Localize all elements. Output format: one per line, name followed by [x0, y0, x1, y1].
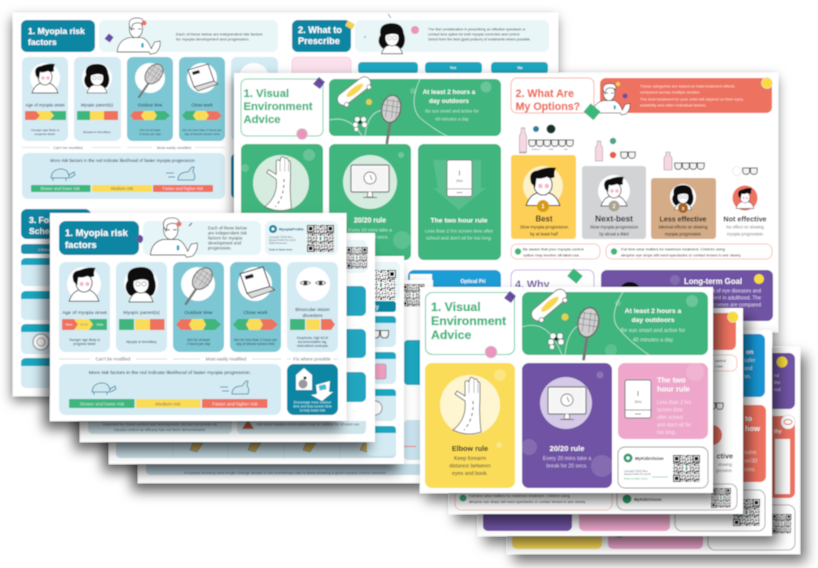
card: binocular vision — [287, 262, 338, 352]
card: two hour rule: Less than 2 hrs — [657, 400, 692, 406]
banner with intro text: Each of these below — [208, 226, 248, 230]
data table strip — [116, 442, 396, 458]
panel: axial length chart — [408, 270, 501, 320]
podium: next-best: by about a third — [599, 232, 629, 236]
heading: Visual Environment Advice — [426, 291, 516, 358]
banner: treatment categories: compared across multiple studies. — [640, 90, 700, 94]
schedule rows — [21, 258, 91, 388]
card: elbow rule: Keep forearm — [454, 456, 487, 462]
card: age of onset: progress faster — [73, 342, 97, 346]
card: age of onset: Age of myopia onset — [62, 310, 107, 316]
card: two hour rule: school and don't sit for too long. — [426, 236, 492, 240]
banner with intro text: for myopia development and progression. — [176, 36, 250, 42]
red panel — [720, 405, 766, 482]
banner: two hours outdoors — [329, 74, 501, 143]
note pills — [511, 244, 772, 259]
banner: treatment categories: The best treatment for your child will depend on their eyes, — [640, 96, 744, 102]
colour strips — [483, 505, 670, 531]
card: two hour rule: Less than 2 hrs screen time after — [425, 228, 494, 234]
card: two hour rule — [618, 363, 708, 439]
banner: two hours outdoors: 40 minutes a day — [435, 116, 470, 122]
summary panel: Medium risk — [155, 402, 181, 406]
heading: What to Prescribe: 2. What to — [298, 25, 342, 35]
banner with intro text — [143, 218, 261, 257]
banner: two hours outdoors — [522, 287, 708, 359]
red panel: sses. — [744, 467, 756, 473]
table header pills — [292, 57, 548, 77]
summary panel: Slower and lower risk — [40, 186, 81, 191]
divider labels — [22, 146, 225, 150]
banner: prescribing: The first consideration in prescribing an effective spectacle or — [428, 28, 526, 32]
not effective option — [702, 403, 733, 473]
podium: less effective: Less effective — [660, 216, 707, 224]
note pills: atropine eye drops still need spectacles or contact lenses to see clearly. — [621, 254, 741, 258]
card: elbow rule — [241, 144, 323, 254]
stacked sheet: front Visual Environment Advice — [420, 287, 713, 493]
podium: next-best: Slow myopia progression — [590, 224, 639, 230]
card: 20/20 rule: break for 20 secs. — [351, 234, 389, 240]
card: myopic parents: Myopic parent(s) — [123, 310, 160, 316]
stacked sheet: right back page — [507, 347, 800, 554]
card: outdoor time: Outdoor time — [184, 310, 213, 316]
modifier divider labels: Can't be modified — [96, 356, 131, 362]
stacked sheet: right third page — [478, 330, 772, 536]
option: not effective: myopia progression — [727, 232, 764, 236]
notes strip: myopia control as efficacy has not been demonstrated. — [114, 428, 206, 432]
divider labels: Most easily modified — [157, 146, 191, 150]
heading: Visual Environment Advice: Environment — [244, 101, 313, 113]
heading: Follow-up Schedule: Schedule — [29, 226, 67, 236]
banner: two hours outdoors: Be sun smart and active for — [621, 328, 685, 334]
stacked sheet: second back page — [80, 233, 375, 442]
logo and QR box: MyopiaProfile — [279, 228, 304, 232]
banner: prescribing: contact lens option for both myopia correction and control. — [428, 32, 520, 36]
podium: best: HAL — [564, 148, 569, 151]
notes strip: Not every myopia control option may be suitable for off-label use — [257, 422, 359, 426]
table rows — [367, 316, 396, 456]
banner: two hours outdoors: day outdoors — [631, 317, 675, 324]
card: age of onset: 10-14 — [80, 322, 88, 326]
teal panels — [340, 286, 366, 402]
podium: best: 1 — [542, 204, 545, 210]
banner: two hours outdoors: At least 2 hours a — [625, 308, 682, 315]
heading: Myopia risk factors: 1. Myopia risk — [65, 228, 129, 239]
purple panel: red — [774, 387, 781, 392]
heading: What Are My Options — [511, 78, 594, 113]
stacked sheet: front Myopia risk factors — [50, 213, 346, 421]
heading: Follow-up Schedule — [21, 209, 91, 239]
banner: treatment categories: These categories are based on total treatment effects — [640, 84, 735, 88]
card: outdoor time: Aim for at least — [187, 338, 210, 342]
banner: long-term goal: To reduce risk of eye diseases and — [684, 288, 761, 294]
panel: encourage outdoor time: Encourage more outdoor — [294, 400, 332, 404]
banner: long-term goal: vision impairment in adulthood. The — [682, 296, 761, 302]
banner with intro text — [99, 18, 278, 54]
follow-up pill: ly — [374, 305, 380, 311]
card: elbow rule — [425, 363, 515, 488]
sheet qr — [362, 262, 400, 300]
notes strip — [88, 420, 366, 434]
caption strip: A myopia showing axial length change similar to the emmetrope rate is likely showing a good myopia control outcome — [184, 470, 386, 475]
panel: encourage outdoor time — [287, 364, 338, 415]
logo and QR box: Myopia Profile Pty Ltd All — [269, 239, 296, 242]
blue panel: safer — [744, 358, 755, 364]
logo and QR box: Copyright ©2023 Alive — [624, 470, 648, 473]
card: close work: Close work — [243, 310, 268, 316]
card: age of onset — [59, 262, 110, 352]
risk cards: 2 hours per day — [139, 132, 161, 136]
card: myopic parents: Myopia is hereditary — [126, 340, 157, 344]
banner with intro text: are independent risk — [208, 230, 248, 236]
banner: prescribing: Select from the best (gold podium) of treatments where possible. — [428, 38, 531, 42]
heading: Follow-up Schedule: 3. Follow-up — [29, 215, 79, 225]
note pill: control — [715, 359, 726, 363]
summary panel: Slower and lower risk — [80, 402, 125, 406]
podium: next-best: Next-best — [595, 214, 633, 224]
banner with intro text: progression. — [208, 246, 232, 250]
card: elbow rule: Elbow rule — [452, 444, 488, 453]
card: age of onset: Older — [96, 322, 104, 326]
note pill — [690, 355, 737, 371]
card: binocular vision: Esophoria, high AC/A — [297, 336, 329, 340]
card: two hour rule: The two hour rule — [430, 218, 488, 224]
purple panel — [760, 353, 795, 409]
schedule strip: 1 Discuss — [38, 248, 53, 252]
heading: Myopia risk factors: factors — [65, 240, 97, 251]
modifier divider labels: Fix where possible — [293, 356, 331, 362]
heading: Why — [511, 268, 594, 310]
banner: prescribing — [355, 14, 549, 54]
qr box — [675, 490, 765, 531]
stacked sheet: right second page — [449, 308, 743, 514]
podium: less effective — [651, 152, 716, 239]
card: two hour rule: after school — [657, 415, 683, 421]
blue panel: on. — [744, 374, 751, 380]
notes and qr row: Full time wear matters for maximum treatment. Children using — [469, 494, 570, 498]
logo and QR box: Scan to learn more — [269, 248, 293, 252]
banner: two hours outdoors: day outdoors — [429, 98, 469, 105]
not effective option: slowing — [718, 462, 733, 467]
not effective option: ctive — [717, 452, 733, 460]
red panel: nutes — [744, 450, 757, 456]
card: outdoor time: 2 hours per day — [187, 342, 211, 346]
colour strips — [512, 528, 703, 549]
heading: Visual Environment Advice: 1. Visual — [244, 88, 289, 100]
summary panel: More risk factors in the red indicate likelihood of faster myopia progression. — [89, 370, 251, 376]
panel: encourage outdoor time: time and less screen time — [293, 404, 332, 408]
summary panel — [22, 153, 278, 199]
heading: Visual Environment Advice: Environment — [431, 314, 506, 328]
modifier divider labels — [59, 356, 338, 362]
card: binocular vision: Binocular vision — [295, 307, 330, 313]
red panel — [760, 415, 795, 498]
risk cards: day of leisure screen time — [184, 132, 220, 136]
card: 20/20 rule: Every 20 mins take a — [348, 228, 392, 232]
risk cards: progress faster — [35, 132, 55, 136]
podium: best: Slow myopia progression — [520, 224, 569, 230]
heading: What Are My Options: 2. What Are — [516, 88, 574, 100]
heading: Myopia risk factors: factors — [28, 37, 57, 47]
banner: treatment categories: suitability and other individual factors. — [640, 102, 706, 108]
heading: Visual Environment Advice: Advice — [431, 328, 471, 342]
podium: less effective: Minimal effects on slowing — [659, 224, 708, 230]
banner: long-term goal — [601, 270, 773, 321]
card: 20/20 rule — [521, 363, 613, 488]
option: not effective: No effect on slowing — [726, 224, 764, 230]
summary panel — [59, 364, 281, 415]
card: 20/20 rule: Every 20 mins take a — [543, 456, 591, 462]
summary panel: Faster and higher risk — [163, 186, 204, 191]
card: binocular vision: intermittent exotropia — [297, 344, 328, 348]
notes and qr row: atropine eye drops still need spectacles or contact lenses to see clearly. — [469, 500, 586, 504]
red banner — [690, 312, 738, 350]
summary panel: Medium risk — [111, 186, 134, 191]
card: two hour rule: screen time — [657, 408, 683, 414]
modifier divider labels: Most easily modified — [206, 356, 247, 362]
divider labels: Can't be modified — [53, 146, 83, 150]
card: elbow rule: distance between — [449, 464, 491, 470]
option: not effective: Not effective — [723, 214, 767, 224]
card: close work — [230, 262, 281, 352]
panel: axial length chart: Optical Pri — [460, 279, 486, 285]
red panel: to — [745, 414, 752, 423]
banner: long-term goal: Long-term Goal — [684, 277, 742, 286]
risk cards: Myopia is hereditary — [83, 130, 111, 134]
podium: less effective: myopia progression — [665, 232, 702, 236]
blue panel: and — [744, 366, 753, 372]
banner: treatment categories — [584, 78, 772, 120]
purple panel: nd — [774, 373, 780, 378]
follow-up pill — [367, 301, 396, 312]
logo and QR box — [265, 221, 338, 255]
notes and qr row — [455, 484, 737, 510]
schedule strip — [21, 244, 91, 254]
heading: What to Prescribe: Prescribe — [298, 36, 340, 46]
sheet qr box — [340, 240, 368, 273]
podium: less effective: 3 — [682, 206, 685, 211]
card: two hour rule: The two — [657, 376, 686, 384]
note pills: Full time wear matters for maximum treatment. Children using — [621, 248, 725, 252]
heading: Visual Environment Advice: 1. Visual — [431, 300, 481, 314]
card: close work: day of leisure screen time — [236, 342, 275, 346]
risk cards: Close work — [191, 102, 213, 108]
banner: two hours outdoors: Be sun smart and active for — [425, 108, 479, 114]
logo and QR box — [618, 447, 708, 488]
podium: next-best: 2 — [613, 204, 616, 210]
card: age of onset: Younger age likely to — [69, 338, 100, 342]
banner: two hours outdoors: 40 minutes a day — [633, 338, 674, 344]
note pills: Be aware that your myopia control — [523, 246, 584, 252]
heading: Visual Environment Advice — [241, 77, 325, 140]
table header pills: No — [517, 66, 523, 70]
note pills: option may involve off-label use. — [523, 252, 580, 258]
banner: long-term goal: long-term outcomes are compared — [685, 302, 761, 308]
option: not effective — [723, 166, 767, 236]
risk cards: Aim for less than 2 hours per — [182, 128, 222, 132]
stacked sheet: fourth back page — [138, 280, 433, 483]
risk cards: Younger age likely to — [31, 128, 60, 132]
banner: two hours outdoors: At least 2 hours a — [423, 89, 476, 96]
page: 1. Myopia risk factors (back sheet) — [13, 13, 558, 396]
logo and QR box: Scan to learn more — [624, 476, 648, 480]
logo and QR box: Copyright ©2023 Alive — [269, 236, 293, 239]
card: elbow rule: eyes and book. — [452, 471, 488, 477]
card: two hour rule — [418, 144, 501, 260]
heading: Visual Environment Advice: Advice — [244, 114, 281, 126]
logo and QR box: MyKidsVision — [635, 456, 664, 461]
heading: Why: 4. Why — [515, 279, 549, 291]
blue panel — [720, 334, 765, 397]
heading: Myopia risk factors: 1. Myopia risk — [28, 26, 85, 36]
banner with intro text: factors for myopia — [208, 236, 243, 240]
heading: What to Prescribe — [292, 20, 355, 52]
qr box — [708, 505, 795, 550]
heading: Myopia risk factors — [21, 20, 95, 52]
podium: best: by at least half — [530, 232, 559, 236]
purple panel: the — [774, 380, 781, 385]
podium: best — [511, 124, 576, 239]
page: Visual Environment Advice and Options sheet — [234, 73, 778, 332]
card: two hour rule: and don't sit for — [657, 422, 691, 428]
panel: encourage outdoor time: to help lower risk — [300, 408, 326, 412]
sheet qr and panels — [402, 284, 424, 460]
podium: best: Atropine — [519, 152, 528, 154]
card: 20/20 rule: 20/20 rule — [354, 218, 386, 224]
podium: best: DIMS — [548, 149, 554, 151]
card: myopic parents — [116, 262, 167, 352]
banner with intro text: development and — [208, 240, 242, 246]
card: two hour rule: hour rule — [657, 384, 690, 394]
table header pills: Yes — [450, 66, 456, 70]
card: close work: Aim for less than 2 hours per — [234, 338, 278, 342]
card: age of onset: More — [66, 322, 73, 326]
summary panel: More risk factors in the red indicate likelihood of faster myopia progression. — [50, 158, 196, 163]
card: two hour rule: too long. — [657, 430, 676, 436]
caption strip — [146, 464, 424, 475]
risk cards: Aim for at least — [140, 128, 160, 132]
podium: next-best — [582, 138, 646, 239]
red panel: ne/3D — [744, 458, 758, 464]
qr box: Scan to learn more — [682, 508, 708, 512]
card: 20/20 rule: break for 20 secs. — [546, 464, 588, 470]
stacked sheet: third back page — [109, 256, 404, 464]
card: outdoor time — [173, 262, 224, 352]
heading: Myopia risk factors — [59, 221, 144, 255]
risk cards: Myopic parent(s) — [81, 102, 114, 108]
blue panel: on — [746, 350, 754, 356]
card: binocular vision: accommodative lag, — [298, 340, 327, 344]
risk cards: Outdoor time — [138, 102, 163, 108]
not effective option: gression — [716, 468, 733, 473]
notes and qr row: MyKidsVision — [634, 497, 662, 502]
card: 20/20 rule — [329, 144, 411, 260]
logo and QR box: Myopia Profile Pty Ltd All — [624, 473, 651, 476]
risk cards: Age of myopia onset — [25, 102, 65, 108]
red panel: thy — [774, 429, 782, 435]
banner with intro text: Each of these below are independent risk factors — [176, 32, 262, 36]
heading: What Are My Options: My Options? — [516, 101, 580, 113]
podium: best: Best — [536, 214, 553, 224]
podium: best: Multifocal — [532, 148, 541, 151]
logo and QR box: Rights Reserved — [269, 242, 287, 245]
notes strip: Important for visual comfort and development, but are not proven as — [103, 422, 217, 426]
note pill: l use. — [715, 364, 724, 368]
summary panel: Faster and higher risk — [212, 402, 258, 406]
red panel: how — [745, 424, 760, 433]
risk cards — [22, 57, 278, 141]
card: 20/20 rule: 20/20 rule — [549, 444, 585, 453]
card: binocular vision: disorders — [302, 313, 323, 319]
